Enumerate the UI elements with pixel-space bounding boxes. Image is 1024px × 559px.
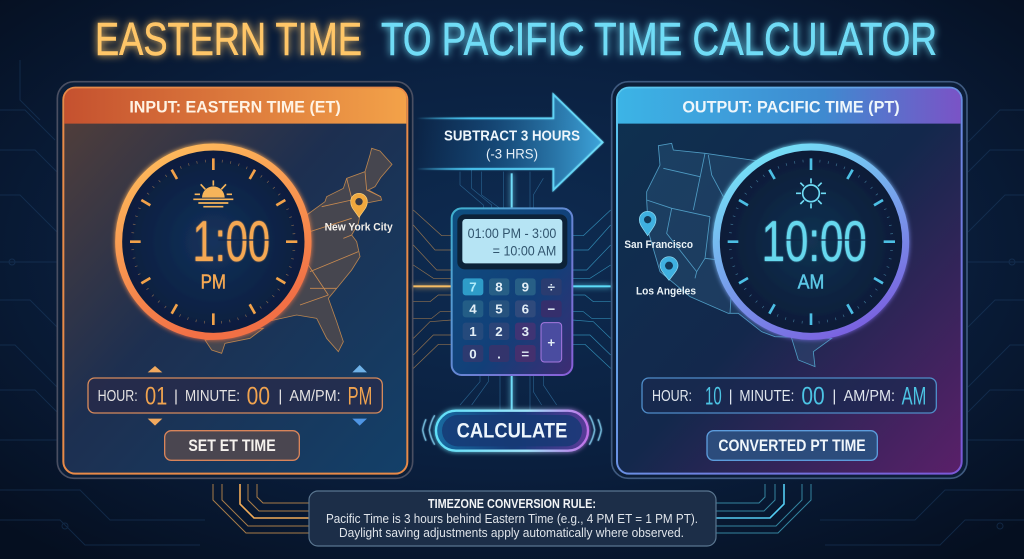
panel frame [57, 82, 413, 478]
time display: 00 [801, 383, 825, 410]
panel header [618, 88, 961, 124]
digital time: 10:00 [762, 210, 867, 274]
pin: San Francisco: San Francisco [624, 239, 693, 251]
glowing trace right [572, 285, 611, 287]
arrow: subtract 3 hours: SUBTRACT 3 HOURS [444, 128, 580, 144]
time display: 10 [705, 383, 722, 410]
time selector: | [174, 388, 178, 405]
button: set ET time [165, 431, 299, 460]
calculator keys: . [497, 346, 501, 361]
circuit lines to calculator [413, 170, 611, 410]
calculator keys: 5 [495, 302, 503, 317]
calculator keys: 7 [469, 280, 477, 295]
time display: AM/PM: [844, 388, 895, 405]
button: calculate [423, 411, 601, 451]
time display: MINUTE: [739, 388, 794, 405]
time display: | [832, 388, 836, 405]
glowing trace bottom [511, 375, 513, 410]
connectors to rule: left [213, 484, 309, 533]
time display: AM [902, 383, 926, 410]
pin: New York City: New York City [325, 221, 393, 233]
circuit pattern left [0, 60, 205, 545]
arrow: subtract 3 hours [417, 94, 603, 190]
time selector: MINUTE: [185, 388, 240, 405]
calculator keys: + [547, 335, 555, 350]
panel header: OUTPUT: PACIFIC TIME (PT) [682, 97, 900, 116]
panel header: INPUT: EASTERN TIME (ET) [129, 97, 341, 116]
pin: Los Angeles [636, 257, 696, 298]
arrows up and down [148, 365, 367, 426]
calculator keys: 9 [522, 280, 529, 295]
pin: San Francisco [624, 211, 693, 251]
calculator keys: − [547, 302, 555, 317]
title [95, 13, 937, 65]
icon: sun on horizon [193, 180, 233, 207]
pin: New York City [325, 193, 393, 233]
time selector: HOUR: [98, 388, 138, 405]
PM label: PM [201, 270, 226, 293]
panel frame [612, 82, 967, 478]
time display: HOUR: [652, 388, 692, 405]
calculator keys: 0 [469, 346, 477, 361]
time selector: 00 [247, 383, 270, 410]
time display [642, 378, 936, 413]
button: converted PT time: CONVERTED PT TIME [718, 436, 866, 455]
time selector [88, 378, 382, 413]
icon: sun [796, 178, 826, 208]
calculator keys [463, 278, 562, 362]
time selector: AM/PM: [289, 388, 341, 405]
pin: Los Angeles: Los Angeles [636, 286, 696, 298]
panel header [64, 88, 406, 124]
glowing trace top [511, 173, 513, 208]
map: eastern US [205, 148, 392, 353]
calculator keys: 8 [495, 280, 503, 295]
callout: timezone conversion rule: Pacific Time is 3 hours behind Eastern Time (e.g., 4 PM ET = 1 PM PT). [326, 512, 698, 526]
calculator [452, 208, 572, 375]
center column [413, 94, 611, 451]
clock: 1:00 PM [119, 147, 308, 336]
digital time: 1:00 [193, 210, 270, 274]
connectors to rule: right [716, 484, 811, 533]
callout: timezone conversion rule: TIMEZONE CONVERSION RULE: [428, 497, 596, 511]
calculator keys: = [521, 346, 529, 361]
calculator keys: 1 [469, 324, 477, 339]
button: calculate: CALCULATE [457, 419, 567, 443]
time selector: PM [348, 383, 372, 410]
title: eastern time: EASTERN TIME [95, 13, 362, 65]
calculator screen: = 10:00 AM [493, 243, 556, 259]
panel: input eastern time [57, 82, 413, 478]
button: set ET time: SET ET TIME [188, 436, 276, 455]
calculator keys: ÷ [548, 280, 555, 295]
AM label: AM [798, 270, 824, 293]
time display: | [729, 388, 733, 405]
calculator screen [462, 219, 562, 263]
calculator keys: 2 [495, 324, 503, 339]
callout: timezone conversion rule: Daylight saving adjustments apply automatically where observed. [339, 526, 684, 540]
map: western US [647, 143, 832, 367]
time selector: 01 [145, 383, 167, 410]
calculator screen: 01:00 PM - 3:00 [468, 225, 557, 241]
callout: timezone conversion rule [309, 491, 716, 546]
calculator keys: 4 [469, 302, 477, 317]
calculator keys: 3 [522, 324, 529, 339]
clock: 10:00 AM [716, 147, 906, 336]
calculator keys: 6 [522, 302, 529, 317]
panel: output pacific time [612, 82, 967, 478]
circuit pattern right [820, 110, 1024, 545]
button: converted PT time [707, 431, 877, 460]
arrow: subtract 3 hours: (-3 HRS) [486, 145, 538, 161]
time selector: | [278, 388, 282, 405]
glowing trace left [413, 285, 452, 287]
